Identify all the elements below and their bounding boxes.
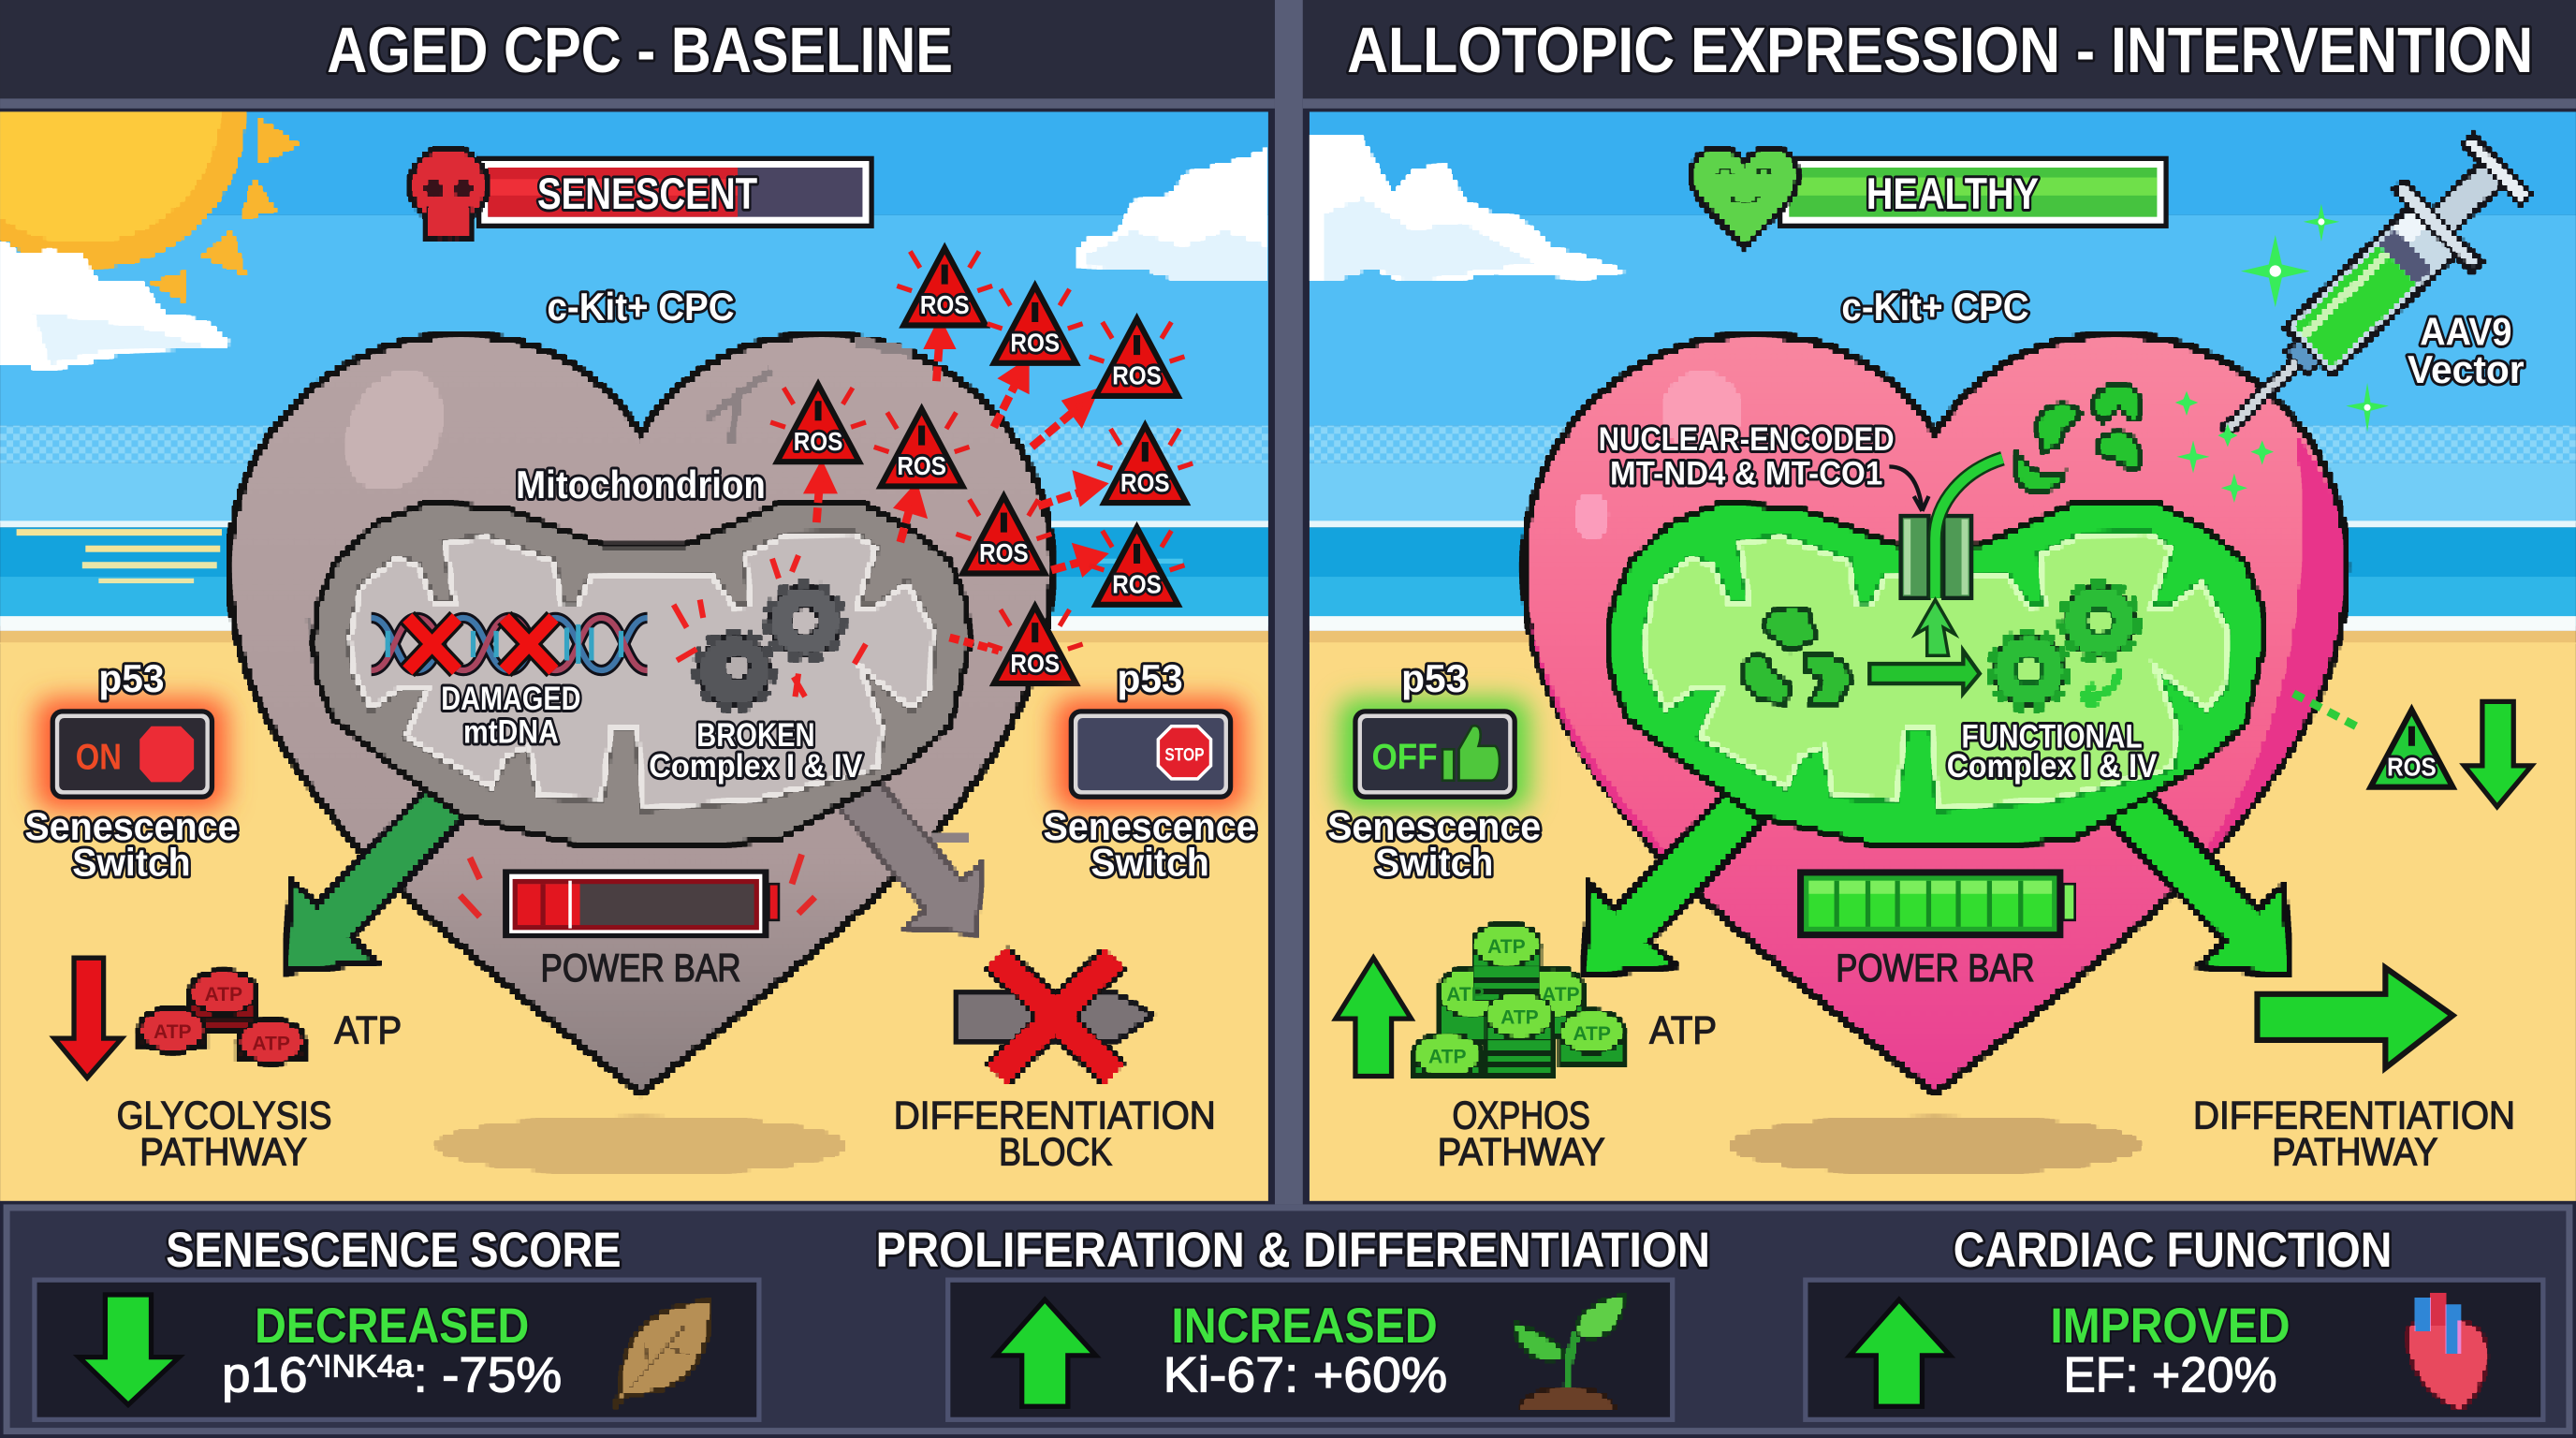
- label: AAV9 vector: [2408, 310, 2525, 391]
- cloud: right panel: [1310, 135, 1627, 283]
- icon: reduced ROS: ROS: [2387, 752, 2437, 781]
- label: ATP on coins low: ATP: [252, 1033, 290, 1054]
- label: AAV9 vector: Vector: [2408, 347, 2525, 391]
- icon: protein fragments inside matrix: [1745, 608, 1850, 703]
- heart: healthy cell: [1525, 335, 2346, 1093]
- label: glycolysis pathway: [117, 1093, 332, 1173]
- power bar: full: [1797, 869, 2075, 938]
- icon: ROS warning 3: [1090, 318, 1184, 396]
- icon: ROS warning 2: [988, 286, 1083, 363]
- label: functional complex I and IV: Complex I & IV: [1947, 748, 2158, 785]
- switch: p53 on: [37, 698, 227, 810]
- arrow: green up: [996, 1299, 1096, 1406]
- icon: functional gears: [1991, 583, 2137, 708]
- icon: protein import channel: [1901, 459, 2002, 598]
- label: nuclear-encoded MT-ND4 and MT-CO1: [1599, 421, 1895, 492]
- status bar: healthy: HEALTHY: [1866, 169, 2039, 219]
- label: p53: p53: [1401, 656, 1467, 700]
- label: broken complex I and IV: Complex I & IV: [649, 748, 863, 785]
- icon: red X marks on DNA: [407, 618, 554, 670]
- value: Ki-67: Ki-67: +60%: [1164, 1348, 1447, 1403]
- label: senescence switch: [1327, 804, 1541, 884]
- arrow: differentiation right: [2257, 968, 2452, 1068]
- icon: ROS warning 2: ROS: [1010, 329, 1060, 358]
- icon: reduced ROS: [2293, 694, 2452, 787]
- icon: ROS warning 1: ROS: [920, 290, 970, 319]
- icon: ROS warning 4: [770, 385, 866, 462]
- ROS arrows rising from mitochondrion: [810, 325, 1101, 651]
- arrow: ROS down: [2465, 701, 2532, 807]
- cloud: right: [1076, 148, 1268, 283]
- switch: p53 on: ON: [76, 737, 122, 777]
- label: senescence switch: Switch: [1375, 840, 1493, 884]
- label: ATP on coins low: [154, 984, 290, 1054]
- arrow: green up: [1850, 1299, 1950, 1406]
- label: functional complex I and IV: [1947, 719, 2158, 785]
- label: ATP on coins low: ATP: [154, 1021, 192, 1043]
- label: damaged mtDNA: [441, 681, 580, 750]
- icon: ROS warning 6: [1097, 426, 1193, 503]
- label: senescence switch right: Switch: [1090, 840, 1209, 884]
- label: p53 right: p53: [1117, 656, 1183, 700]
- label: power bar: POWER BAR: [540, 946, 741, 990]
- switch: p53 off: [1339, 698, 1530, 810]
- DNA: damaged strand: [372, 618, 648, 670]
- icon: ROS warning 1: [897, 248, 992, 325]
- label: senescence switch right: Senescence: [1044, 804, 1257, 848]
- label: ATP on green coins: ATP: [1542, 984, 1580, 1005]
- value: improved: IMPROVED: [2050, 1299, 2291, 1354]
- label: broken complex I and IV: [649, 717, 863, 785]
- header: aged CPC baseline: [0, 0, 1275, 109]
- status bar: senescent: SENESCENT: [537, 169, 757, 219]
- background: sky sea and sand: [1310, 111, 2576, 1201]
- label: senescence switch left: Senescence: [24, 804, 239, 848]
- label: senescence switch left: [24, 804, 239, 884]
- icon: blocked differentiation: [958, 958, 1151, 1075]
- arrow: green down: [79, 1295, 179, 1405]
- label: power bar: POWER BAR: [1836, 946, 2035, 990]
- icon: skull: [411, 148, 487, 240]
- icon: ROS warning 8: ROS: [1112, 570, 1162, 599]
- icon: sun: [0, 111, 300, 303]
- arrow: green up: [1336, 958, 1412, 1077]
- heading: proliferation and differentiation: PROLIFERATION & DIFFERENTIATION: [875, 1223, 1710, 1278]
- label: nuclear-encoded MT-ND4 and MT-CO1: MT-ND4 & MT-CO1: [1610, 456, 1882, 492]
- icon: ROS warning 9: ROS: [1010, 649, 1060, 678]
- label: differentiation pathway: PATHWAY: [2272, 1129, 2438, 1173]
- mitochondrion: functional: [1608, 503, 2263, 846]
- icon: ROS warning 5: ROS: [897, 451, 946, 480]
- box: senescence result: [35, 1280, 759, 1419]
- switch: p53 off: OFF: [1372, 737, 1438, 777]
- value: increased: INCREASED: [1171, 1299, 1438, 1354]
- arrow: to glycolysis: [283, 792, 464, 977]
- switch: stop: [1055, 698, 1245, 810]
- icon: imported protein fragments: [2015, 385, 2140, 491]
- heading: cardiac function: CARDIAC FUNCTION: [1954, 1223, 2392, 1278]
- box: proliferation result: [948, 1280, 1673, 1419]
- icon: ATP coins low: [139, 971, 304, 1064]
- panel: aged CPC baseline scene: [0, 0, 1268, 1201]
- icon: ROS warning 7: ROS: [979, 538, 1029, 567]
- label: AAV9 vector: AAV9: [2420, 310, 2511, 354]
- panel: allotopic expression intervention scene: [1310, 111, 2576, 1201]
- label: differentiation pathway: [2193, 1093, 2515, 1173]
- shadow on sand: [1730, 1116, 2141, 1175]
- icon: ROS warning 7: [956, 496, 1051, 574]
- label: broken complex I and IV: BROKEN: [696, 717, 815, 754]
- value: decreased: DECREASED: [255, 1299, 529, 1354]
- label: ATP on green coins: ATP: [1487, 936, 1526, 958]
- label: c-Kit+ CPC: c-Kit+ CPC: [1841, 285, 2029, 329]
- label: differentiation block: DIFFERENTIATION: [894, 1093, 1216, 1137]
- box: cardiac result: [1806, 1280, 2543, 1419]
- arrow: to differentiation: [2083, 762, 2331, 1016]
- arrow: label pointer: [1889, 466, 1928, 511]
- icon: anatomical heart: [2408, 1295, 2487, 1410]
- metric: senescence score: [35, 1223, 759, 1419]
- arrow: blocked grey differentiation: [839, 781, 985, 938]
- label: c-Kit+ CPC: c-Kit+ CPC: [547, 285, 735, 329]
- background: sky sea and sand: [0, 111, 1268, 1201]
- label: ATP on green coins: ATP: [1428, 1047, 1467, 1068]
- icon: ROS warning 9: [988, 607, 1083, 683]
- label: Mitochondrion: Mitochondrion: [516, 462, 766, 506]
- arrow: assembly flow: [1869, 600, 1980, 694]
- header: allotopic expression intervention: [1303, 0, 2576, 109]
- red damage sparks: [674, 555, 866, 697]
- label: senescence switch left: Switch: [72, 840, 191, 884]
- cloud: left: [0, 238, 230, 372]
- status bar: healthy: [1692, 149, 2169, 246]
- heading: senescence score: SENESCENCE SCORE: [166, 1223, 621, 1278]
- label: differentiation block: [894, 1093, 1216, 1173]
- label: differentiation block: BLOCK: [999, 1129, 1112, 1173]
- icon: ATP coin stacks: [1414, 923, 1623, 1077]
- icon: green sparkles: [2175, 204, 2389, 503]
- icon: ROS warning 8: [1090, 527, 1184, 605]
- icon: syringe AAV9 vector: [2188, 125, 2540, 471]
- label: damaged mtDNA: mtDNA: [463, 713, 559, 750]
- label: ATP: ATP: [1649, 1007, 1717, 1051]
- label: OXPHOS pathway: OXPHOS: [1453, 1093, 1590, 1137]
- label: functional complex I and IV: FUNCTIONAL: [1962, 719, 2143, 756]
- icon: smiling heart: [1692, 149, 1797, 246]
- icon: ROS warning 5: [874, 409, 970, 486]
- status bar: senescent: [411, 148, 874, 240]
- icon: dead leaf: [614, 1301, 710, 1406]
- senescence shadow on sand: [435, 1116, 846, 1175]
- label: glycolysis pathway: PATHWAY: [139, 1129, 307, 1173]
- arrow: to OXPHOS: [1543, 762, 1792, 1016]
- panel: outcome metrics: [7, 1208, 2569, 1431]
- icon: ROS warning 4: ROS: [794, 427, 842, 456]
- power bar: low: [460, 855, 815, 938]
- label: glycolysis pathway: GLYCOLYSIS: [117, 1093, 332, 1137]
- mitochondrion: damaged: [314, 503, 970, 846]
- metric: proliferation and differentiation: [875, 1223, 1710, 1419]
- icon: ROS warning 6: ROS: [1120, 468, 1170, 497]
- label: p53 left: p53: [98, 656, 165, 700]
- value: p16 INK4a: p16: [222, 1348, 304, 1403]
- label: OXPHOS pathway: PATHWAY: [1438, 1129, 1605, 1173]
- label: differentiation pathway: DIFFERENTIATION: [2193, 1093, 2515, 1137]
- value: p16 INK4a: ^INK4a: [308, 1350, 414, 1385]
- metric: cardiac function: [1806, 1223, 2543, 1419]
- label: ATP left: ATP: [334, 1007, 402, 1051]
- center divider: [1275, 0, 1303, 1204]
- icon: ROS warning 3: ROS: [1112, 361, 1162, 390]
- label: ATP on green coins: [1428, 936, 1611, 1068]
- switch: stop: STOP: [1164, 746, 1205, 766]
- label: nuclear-encoded MT-ND4 and MT-CO1: NUCLEAR-ENCODED: [1599, 421, 1895, 458]
- label: ATP on green coins: ATP: [1446, 984, 1485, 1005]
- icon: broken gears: [696, 583, 842, 708]
- label: damaged mtDNA: DAMAGED: [441, 681, 580, 717]
- label: senescence switch: Senescence: [1327, 804, 1541, 848]
- heart: senescent cell: [230, 335, 1051, 1093]
- arrow: red down: [54, 958, 122, 1078]
- value: p16 INK4a: : -75%: [414, 1348, 562, 1403]
- value: EF: EF: +20%: [2063, 1348, 2277, 1403]
- icon: sprout: [1515, 1297, 1623, 1410]
- label: ATP on green coins: ATP: [1573, 1023, 1611, 1045]
- label: ATP on green coins: ATP: [1500, 1006, 1539, 1028]
- label: senescence switch right: [1044, 804, 1257, 884]
- label: OXPHOS pathway: [1438, 1093, 1605, 1173]
- header: aged CPC baseline: AGED CPC - BASELINE: [327, 14, 953, 86]
- label: ATP on coins low: ATP: [204, 984, 242, 1005]
